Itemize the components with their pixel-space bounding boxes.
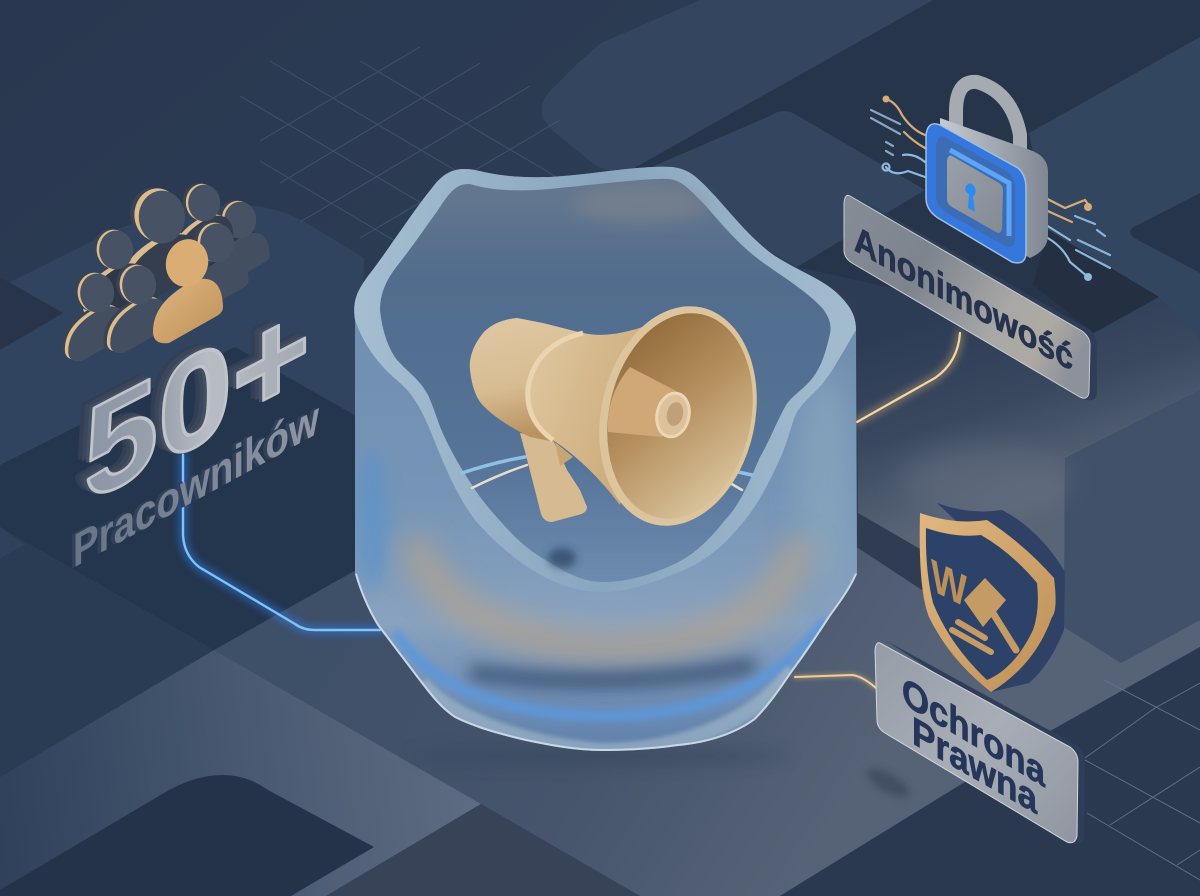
panel: bottom-right dark slab (780, 647, 1200, 896)
panel: left lower slab (0, 527, 214, 777)
plate inner (936, 136, 1015, 247)
plate: Anonimowość (844, 194, 1097, 400)
number: 50+: 50+ (73, 264, 299, 529)
panel: centre-right slab (640, 111, 925, 267)
panel: dark band by shield (858, 513, 925, 592)
number: 50+: 50+ (77, 265, 303, 530)
number: 50+: 50+ (84, 267, 310, 532)
shield side (937, 503, 1065, 692)
icon: shield with gavel (920, 503, 1065, 692)
circuit traces left (871, 96, 925, 177)
icon: padlock (871, 82, 1110, 281)
number: 50+: 50+ (81, 267, 307, 532)
glass vessel (354, 167, 857, 751)
dark person left rear (83, 229, 148, 318)
panel: dark foot slab (1033, 230, 1159, 333)
panel: lit right slab (1064, 390, 1200, 663)
blue glass plate (926, 124, 1026, 263)
panel: top rounded slab (542, 0, 933, 171)
plate face (844, 195, 1090, 398)
dark person front middle (103, 264, 170, 353)
driver tip (653, 390, 693, 440)
shackle (956, 82, 1020, 165)
plate label line two: Prawna (912, 708, 1038, 824)
pale bottom lip (421, 671, 793, 751)
dark person front left (61, 272, 128, 361)
dark base band (470, 665, 755, 681)
icon: megaphone (470, 291, 776, 541)
gold person (153, 234, 223, 343)
rear tube (470, 318, 590, 442)
panel: small lit wedge (0, 527, 25, 558)
panel: bottom-left dark slab (0, 775, 374, 896)
horn body (528, 320, 660, 505)
warm top reflection (570, 187, 710, 223)
plate label line one: Ochrona (902, 669, 1046, 797)
panel: upper-right slab (1029, 37, 1200, 340)
floor shadow spot (548, 548, 576, 568)
panel: bottom-centre slab (326, 804, 640, 896)
plate face (875, 643, 1078, 843)
shield gold frame (920, 513, 1056, 692)
handle (520, 433, 587, 522)
panel: dark band behind lock (634, 0, 1200, 340)
plate edge (885, 640, 1085, 844)
connector: blue glow line to 50+ (183, 455, 380, 630)
panel: main floor left (0, 650, 481, 896)
gold reflection ring (414, 540, 800, 648)
dark person rear right (209, 200, 270, 284)
floor ring blue (462, 457, 752, 475)
driver cone (608, 367, 680, 437)
circuit traces right (1030, 190, 1110, 281)
glass inner opening (380, 179, 831, 582)
label: Pracowników: Pracowników (70, 391, 316, 579)
right pale wall (800, 382, 850, 554)
glass outer body (354, 167, 857, 751)
tip hole (665, 401, 685, 427)
bell rim (580, 291, 776, 541)
gavel head (964, 578, 1006, 627)
trigger (555, 442, 573, 466)
plate glow band (950, 150, 1009, 236)
panel: main floor right (214, 548, 1200, 896)
base highlight (355, 574, 857, 751)
dark person rear big (119, 187, 203, 305)
keyhole (965, 183, 976, 212)
floor ring beige (472, 465, 742, 490)
dark person rear centre (173, 183, 234, 267)
icon: group of people (61, 183, 270, 361)
collar (528, 333, 583, 440)
gavel handle (991, 610, 1016, 650)
panel: left dark slab (0, 347, 356, 650)
shield face (926, 528, 1038, 680)
left blue edge (356, 450, 388, 590)
panel: left lit slab (0, 205, 364, 600)
plate label: Anonimowość (854, 217, 1073, 380)
panel: lit floor under Anonimowość (797, 267, 1200, 630)
connector: gold glow line to Anonimowość (857, 333, 960, 422)
key plate (947, 156, 1003, 233)
label: Pracowników: Pracowników (73, 390, 319, 578)
lock side (940, 118, 1048, 258)
connector: gold glow line to Ochrona Prawna (795, 675, 876, 688)
dark person mid right (189, 222, 249, 311)
gavel base (952, 622, 991, 652)
blue base glow (395, 620, 825, 716)
rim band (354, 167, 856, 592)
bell interior (589, 300, 771, 532)
panel: notch top-left (0, 277, 63, 350)
letter W: W (931, 550, 967, 618)
plate edge (852, 194, 1097, 400)
plate: Ochrona Prawna (875, 640, 1085, 844)
